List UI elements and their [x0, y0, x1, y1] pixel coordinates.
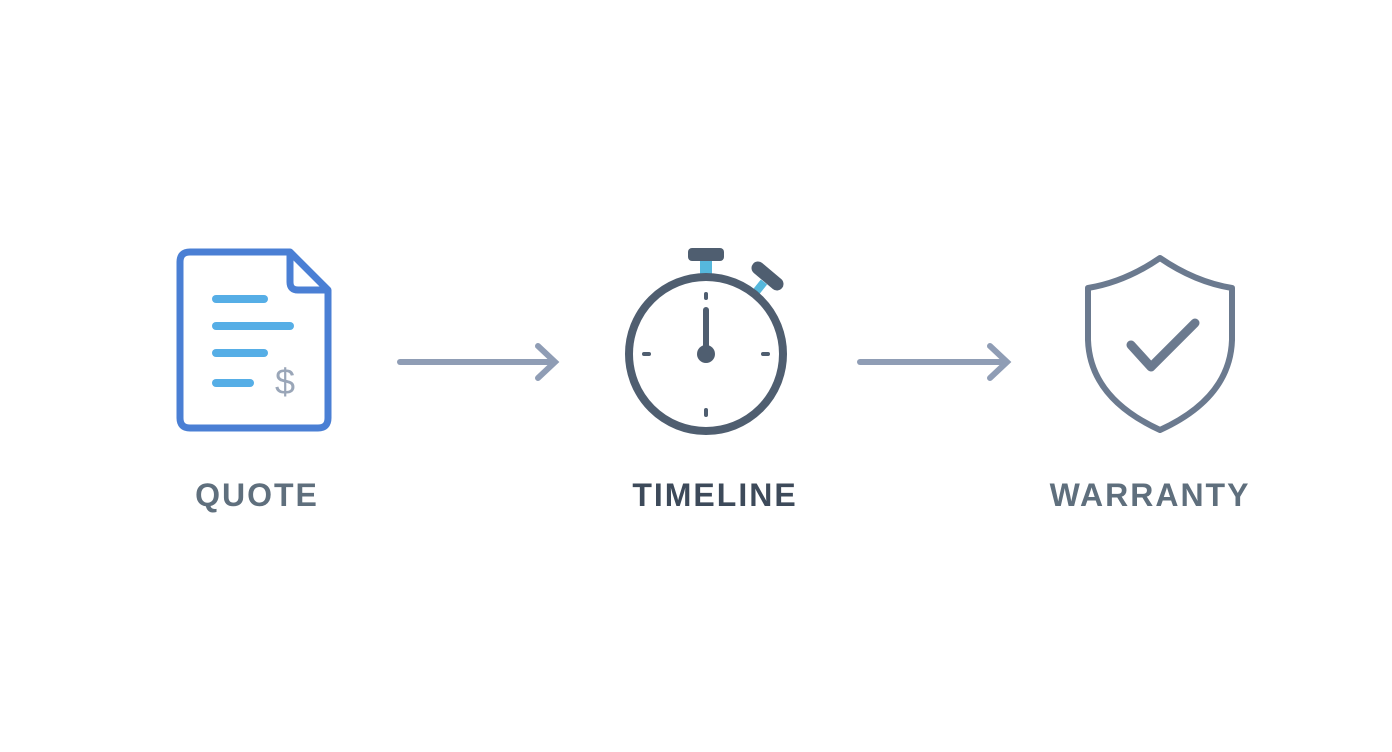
icon: quote document — [180, 252, 328, 428]
label: warranty: WARRANTY — [1050, 477, 1250, 513]
arrow 2 — [860, 346, 1007, 378]
label: timeline: TIMELINE — [632, 477, 798, 513]
arrow 1 — [400, 346, 555, 378]
label: quote: QUOTE — [195, 477, 319, 513]
icon: shield — [1088, 258, 1232, 430]
icon: stopwatch — [629, 248, 783, 431]
icon: quote document: $ — [275, 361, 295, 402]
